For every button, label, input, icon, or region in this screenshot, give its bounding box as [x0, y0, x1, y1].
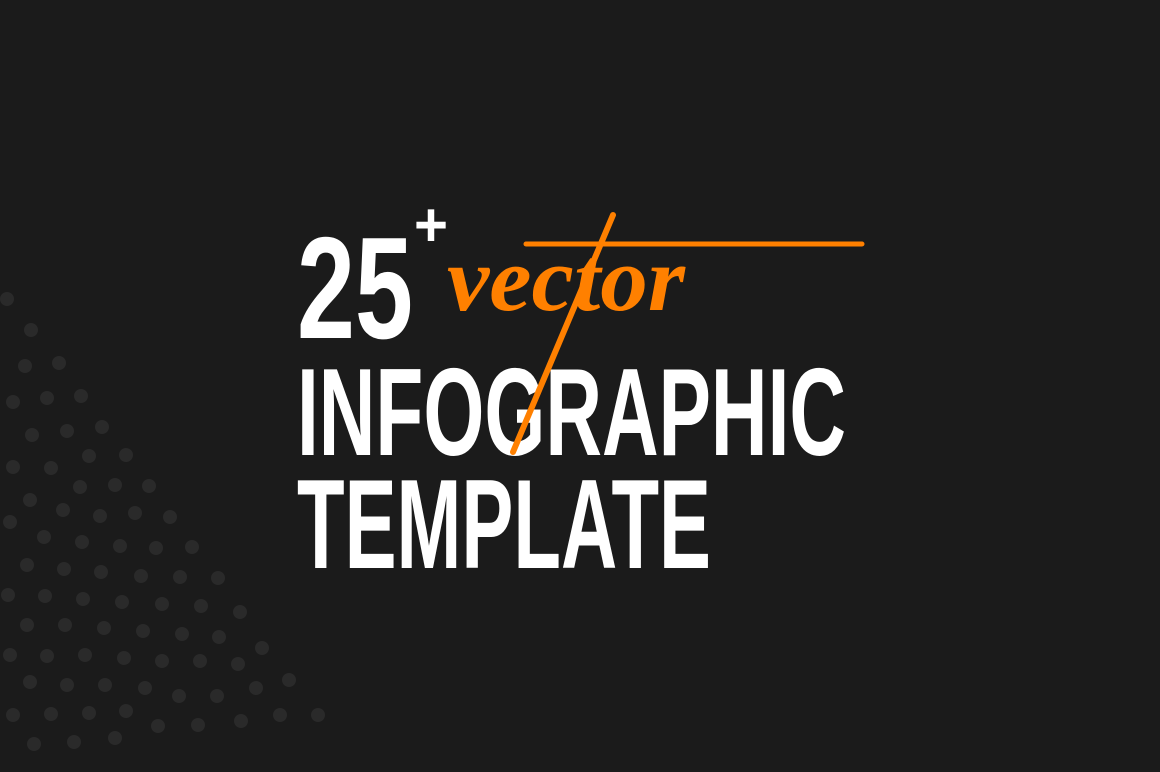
INFOGRAPHIC: INFOGRAPHIC: [297, 344, 846, 482]
plus sign: +: [414, 191, 448, 260]
title: [297, 191, 846, 595]
TEMPLATE: TEMPLATE: [297, 453, 711, 595]
number 25: 25: [297, 207, 413, 369]
script word vector: [447, 215, 862, 452]
dot pattern: [0, 292, 325, 751]
script word vector: vector: [447, 228, 686, 330]
